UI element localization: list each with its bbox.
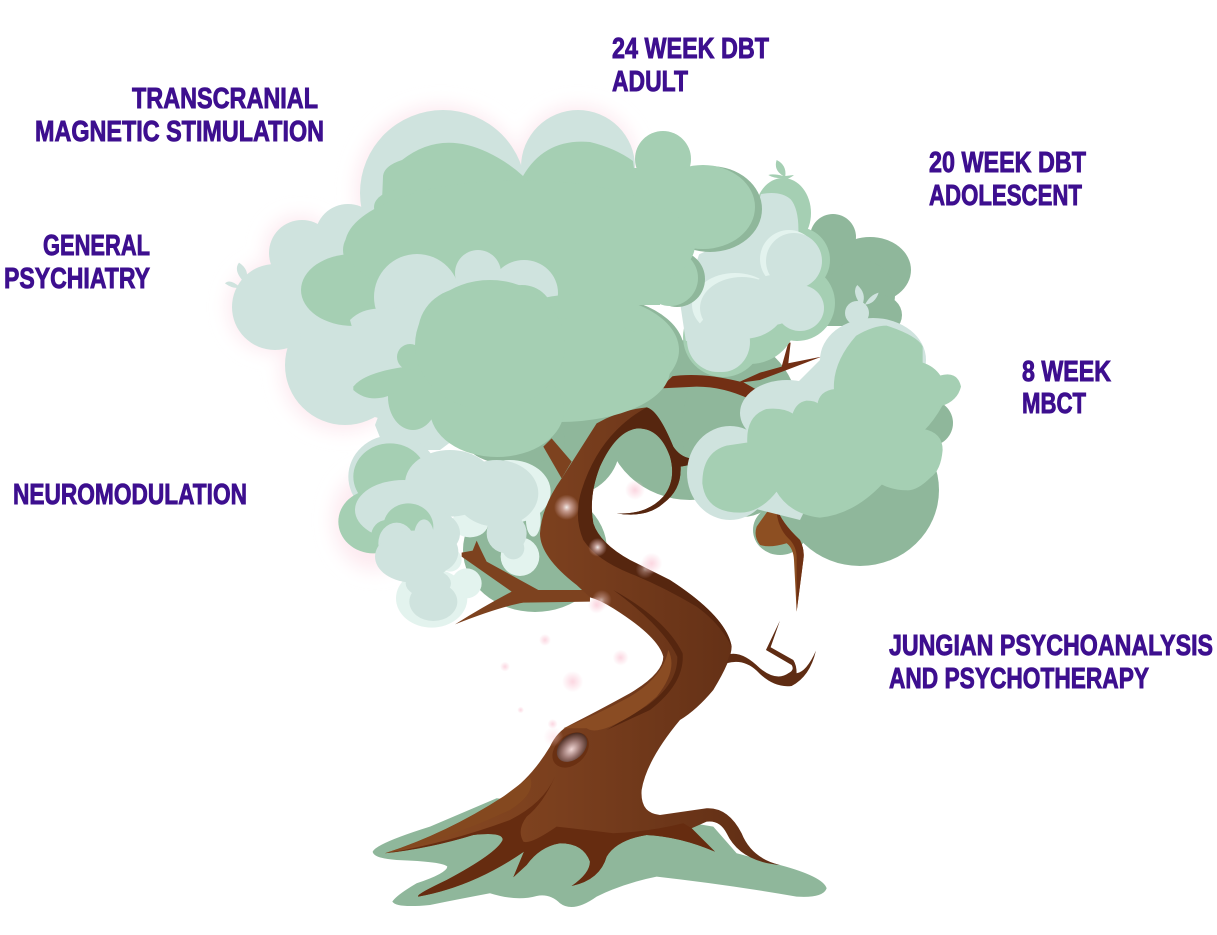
leaves: left — [225, 263, 247, 288]
label: Transcranial Magnetic Stimulation: MAGNETIC STIMULATION — [35, 116, 324, 148]
canopy: main pale layer — [232, 110, 640, 450]
label: General Psychiatry: PSYCHIATRY — [4, 263, 150, 295]
canopy: main mid green front — [353, 280, 679, 457]
label: 20 week DBT adolescent: ADOLESCENT — [929, 180, 1082, 212]
branch: right lower stub shadow — [776, 499, 804, 612]
branch: right lower stub — [756, 499, 804, 612]
sparkles — [500, 480, 662, 747]
canopy: main mid green back — [301, 131, 755, 326]
label: 8 week MBCT: MBCT — [1022, 388, 1086, 420]
trunk — [385, 407, 816, 897]
cloud: right — [687, 285, 960, 520]
trunk: hole — [545, 725, 596, 775]
cloud panel: pale backing — [682, 194, 797, 340]
trunk main shape — [385, 407, 780, 897]
trunk: light root highlight — [385, 777, 531, 853]
ground — [373, 798, 827, 907]
label: Neuromodulation: NEUROMODULATION — [13, 479, 247, 511]
trunk: light streak — [563, 650, 671, 730]
canopy: dark back foliage — [463, 214, 953, 612]
trunk: right twig — [727, 621, 816, 686]
cloud lobes: pale — [694, 233, 824, 372]
cloud: upper right — [682, 160, 835, 377]
branches: left — [455, 438, 590, 624]
label: Transcranial Magnetic Stimulation — [35, 83, 324, 148]
trunk: inner dark line — [607, 590, 683, 730]
label: General Psychiatry: GENERAL — [43, 230, 150, 262]
right cloud: mid green body — [703, 327, 960, 517]
canopy: pale middle layer — [350, 250, 558, 440]
label: 8 week MBCT: 8 WEEK — [1022, 356, 1111, 388]
label: 24 week DBT adult: 24 WEEK DBT — [612, 33, 769, 65]
label: Jungian Psychoanalysis and Psychotherapy: AND PSYCHOTHERAPY — [889, 663, 1149, 695]
cloud highlight — [692, 230, 818, 337]
leaves: right cloud — [855, 285, 879, 305]
trunk: dark roots — [385, 777, 715, 897]
label: 24 week DBT adult: ADULT — [612, 66, 688, 98]
branch: upper right — [663, 343, 822, 399]
label: 24 week DBT adult — [612, 33, 769, 98]
pink glow behind canopy — [228, 106, 637, 570]
trunk: dark arch band — [578, 407, 732, 647]
label: Transcranial Magnetic Stimulation: TRANSCRANIAL — [132, 83, 318, 115]
leaf: pale tip — [341, 373, 358, 382]
label: 8 week MBCT — [1022, 356, 1111, 420]
canopy: main shadow edge — [486, 166, 762, 406]
leaves: top right — [768, 160, 794, 179]
cloud lobe: lower left — [687, 308, 749, 372]
cloud: lower left — [338, 435, 551, 628]
label: Jungian Psychoanalysis and Psychotherapy — [889, 630, 1213, 695]
label: General Psychiatry — [4, 230, 150, 295]
label: 20 week DBT adolescent: 20 WEEK DBT — [929, 147, 1086, 179]
label: 20 week DBT adolescent — [929, 147, 1086, 212]
leaf: left twig — [353, 367, 402, 398]
